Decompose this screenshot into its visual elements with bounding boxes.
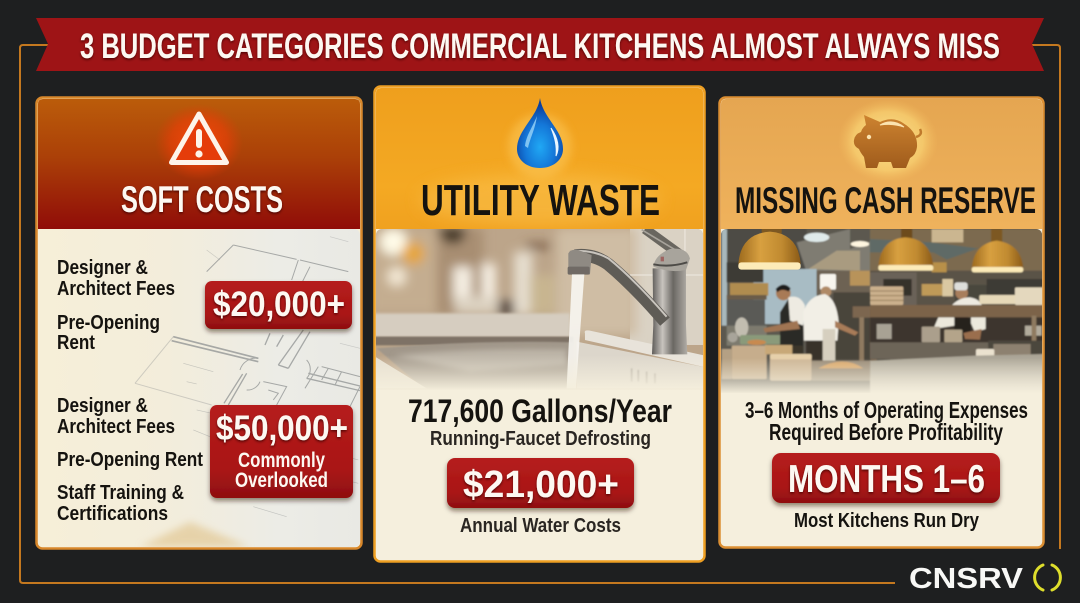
- badge: months 1-6: MONTHS 1–6: [788, 458, 985, 501]
- faucet photo: [376, 229, 703, 388]
- list: second group of costs: Certifications: [57, 503, 168, 525]
- lamps: [878, 229, 1023, 272]
- statement: operating expenses: Required Before Profitability: [769, 419, 1003, 445]
- statement: operating expenses: [745, 397, 1028, 445]
- badge: $20,000+: $20,000+: [213, 285, 345, 324]
- panel: utility waste: [370, 86, 710, 565]
- icon: warning triangle: [172, 114, 226, 162]
- badge: $21,000+: $21,000+: [463, 464, 619, 506]
- running water: [567, 274, 584, 388]
- icon: piggy bank: [854, 115, 921, 168]
- kitchen photo: [721, 229, 1042, 392]
- cash reserve header: [721, 99, 1042, 229]
- list: second group of costs: Designer &: [57, 395, 148, 417]
- heading: soft costs: SOFT COSTS: [121, 179, 283, 220]
- kitchen left half: [721, 229, 883, 382]
- chef with apron: [763, 285, 805, 359]
- logo: CNSRV: [909, 563, 1060, 595]
- list: second group of costs: [57, 395, 203, 525]
- badge: $50,000+ commonly overlooked: Overlooked: [235, 469, 328, 492]
- caption: annual water costs: Annual Water Costs: [460, 515, 621, 537]
- panel: soft costs: [36, 98, 362, 548]
- list: first group of costs: Architect Fees: [57, 278, 175, 300]
- caption: most kitchens run dry: Most Kitchens Run Dry: [794, 510, 980, 532]
- list: second group of costs: Architect Fees: [57, 416, 175, 438]
- statistic: gallons per year: Running-Faucet Defrosting: [430, 428, 651, 450]
- icon: water drop: [508, 98, 572, 178]
- soft costs header: [38, 99, 360, 229]
- blueprint background image: [134, 229, 360, 547]
- statistic: gallons per year: [408, 393, 672, 450]
- icon: logo ring: [1035, 565, 1060, 590]
- list: second group of costs: Pre-Opening Rent: [57, 449, 203, 471]
- list: second group of costs: Staff Training &: [57, 482, 184, 504]
- badge: $50,000+ commonly overlooked: $50,000+: [216, 409, 348, 448]
- heading: utility waste: UTILITY WASTE: [421, 176, 660, 225]
- utility waste header: [376, 88, 703, 229]
- kitchen right half: [870, 229, 1047, 396]
- chef with hat: [803, 274, 858, 361]
- title banner: [36, 18, 1044, 71]
- list: first group of costs: Rent: [57, 332, 95, 354]
- badge: $50,000+ commonly overlooked: Commonly: [238, 449, 325, 472]
- panel: missing cash reserve: [720, 98, 1047, 553]
- boxes and tray: [722, 349, 732, 379]
- list: first group of costs: Designer &: [57, 257, 148, 279]
- faucet body: [568, 229, 690, 354]
- badge: $50,000+ commonly overlooked: [210, 405, 353, 498]
- statistic: gallons per year: 717,600 Gallons/Year: [408, 393, 672, 429]
- left lamp: [738, 229, 801, 270]
- logo: CNSRV: CNSRV: [909, 563, 1024, 595]
- list: first group of costs: [57, 257, 175, 354]
- list: first group of costs: Pre-Opening: [57, 312, 160, 334]
